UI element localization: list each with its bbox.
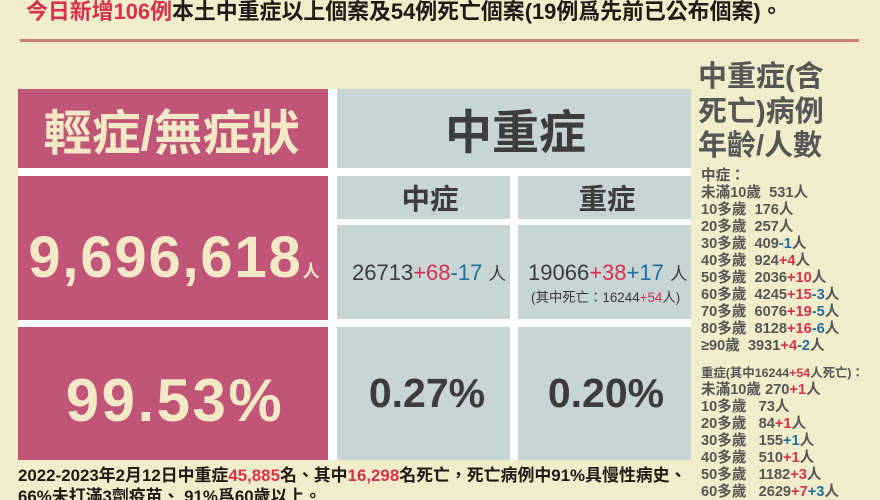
age panel heading: 年齡/人數 — [698, 130, 822, 162]
age panel heading: 死亡)病例 — [698, 96, 824, 128]
footnote — [18, 466, 686, 500]
moderate age list: 未滿10歲 531人 — [701, 185, 808, 201]
moderate age list: 70多歲 6076+19-5人 — [701, 304, 839, 320]
panel: severe percent — [518, 327, 691, 460]
moderate age list: 80多歲 8128+16-6人 — [701, 321, 839, 337]
panel: moderate and severe heading — [337, 89, 691, 168]
severe age list — [701, 366, 864, 500]
panel: severe percent: 0.20% — [548, 370, 664, 416]
table background — [18, 89, 691, 460]
severe age list: 60多歲 2629+7+3人 — [701, 484, 839, 500]
moderate age list: 10多歲 176人 — [701, 202, 793, 218]
panel: severe count — [518, 225, 691, 319]
moderate age list — [701, 167, 839, 354]
severe count number: 19066+38+17 人 — [528, 260, 687, 285]
panel: mild heading: 輕症/無症狀 — [44, 106, 299, 160]
severe age list: 20多歲 84+1人 — [701, 416, 806, 432]
panel: moderate count — [337, 225, 510, 319]
panel: moderate heading — [337, 176, 510, 219]
moderate age list: ≥90歲 3931+4-2人 — [701, 338, 825, 354]
moderate age list: 30多歲 409-1人 — [701, 236, 806, 252]
severe deaths note: (其中死亡：16244+54人) — [531, 290, 680, 305]
footnote: 2022-2023年2月12日中重症45,885名、其中16,298名死亡，死亡病例中91%具慢性病史、 — [18, 466, 686, 485]
severe age list: 30多歲 155+1人 — [701, 433, 814, 449]
panel: mild percent — [18, 327, 328, 460]
moderate age list: 50多歲 2036+10人 — [701, 270, 826, 286]
panel: moderate percent — [337, 327, 510, 460]
panel: severe heading: 重症 — [578, 184, 636, 216]
moderate count number: 26713+68-17 人 — [352, 260, 506, 285]
panel: mild count: 9,696,618人 — [28, 224, 320, 290]
panel: mild count — [18, 176, 328, 320]
moderate age list: 40多歲 924+4人 — [701, 253, 810, 269]
moderate age list: 60多歲 4245+15-3人 — [701, 287, 839, 303]
panel: mild heading — [18, 89, 328, 168]
panel: moderate heading: 中症 — [401, 184, 458, 216]
panel: moderate percent: 0.27% — [369, 370, 485, 416]
moderate age list: 20多歲 257人 — [701, 219, 793, 235]
panel: mild percent: 99.53% — [66, 367, 284, 434]
severe age list: 10多歲 73人 — [701, 399, 789, 415]
severe age list: 未滿10歲 270+1人 — [701, 382, 821, 398]
age panel heading — [698, 61, 824, 162]
moderate age list: 中症： — [701, 168, 745, 184]
severe age list: 重症(其中16244+54人死亡)： — [701, 366, 864, 380]
age panel heading: 中重症(含 — [698, 61, 824, 93]
severe age list: 50多歲 1182+3人 — [701, 467, 822, 483]
panel: severe heading — [518, 176, 691, 219]
panel: moderate and severe heading: 中重症 — [445, 106, 586, 159]
severe age list: 40多歲 510+1人 — [701, 450, 814, 466]
